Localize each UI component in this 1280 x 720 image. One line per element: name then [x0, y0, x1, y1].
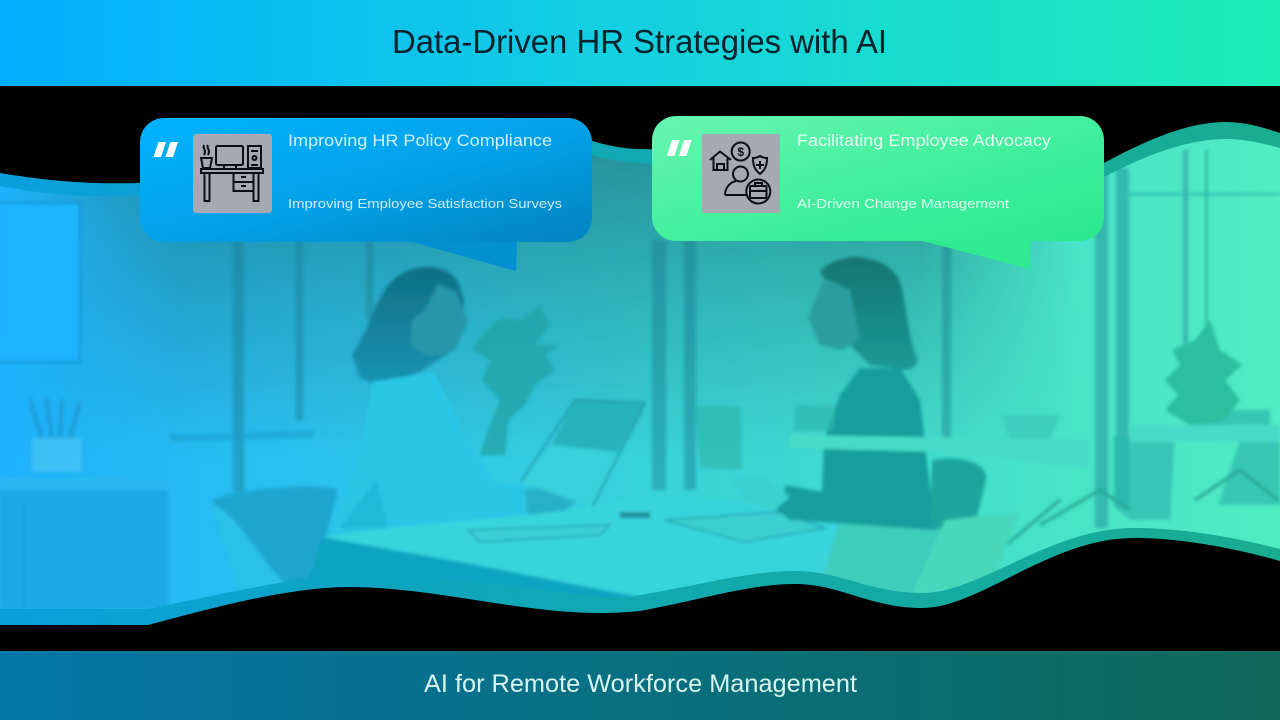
chairs and back room	[695, 405, 1280, 520]
under-table shadow	[285, 537, 700, 620]
heading: Facilitating Employee Advocacy	[797, 131, 1052, 150]
top black wave	[0, 86, 1280, 184]
panel: right speech bubble	[652, 116, 1104, 269]
subheading: AI-Driven Change Management	[797, 196, 1009, 211]
bubble body	[140, 118, 592, 242]
laptop	[521, 400, 645, 507]
icon: employee benefits: $	[737, 145, 744, 159]
jacket	[776, 368, 935, 530]
bubble tail	[915, 239, 1030, 269]
quote mark	[154, 142, 178, 157]
hair	[820, 257, 918, 370]
icon: employee benefits	[702, 134, 780, 213]
right woman	[730, 257, 935, 530]
back tables	[790, 425, 1280, 468]
hand	[525, 483, 578, 518]
bubble body	[652, 116, 1104, 241]
blouse	[330, 372, 540, 532]
notebook	[468, 512, 825, 542]
icon: office desk	[193, 134, 272, 213]
left woman	[330, 267, 578, 532]
footer text: AI for Remote Workforce Management	[424, 670, 857, 698]
bottom black wave	[0, 538, 1280, 651]
subheading: Improving Employee Satisfaction Surveys	[288, 196, 563, 211]
pencil cup	[30, 398, 82, 472]
cabinet	[0, 478, 168, 609]
header bar	[0, 0, 1280, 86]
quote mark	[667, 140, 692, 156]
top wave band	[0, 86, 1280, 197]
left chair	[212, 486, 338, 590]
front chair	[912, 458, 1020, 594]
hands	[730, 475, 790, 510]
office photo background	[0, 139, 1280, 609]
footer bar	[0, 651, 1280, 720]
bottom wave band	[0, 528, 1280, 651]
table	[322, 495, 960, 597]
bubble tail	[405, 240, 517, 271]
face	[808, 278, 860, 350]
face	[410, 284, 468, 357]
heading: Improving HR Policy Compliance	[288, 131, 552, 150]
chair legs	[1000, 470, 1278, 550]
plant left	[472, 306, 560, 455]
panel: left speech bubble	[140, 118, 592, 271]
window posts	[233, 150, 1280, 528]
hair	[352, 267, 464, 386]
wall frame	[0, 203, 80, 362]
side table	[170, 431, 315, 442]
plant right	[1165, 320, 1242, 425]
title: Data-Driven HR Strategies with AI	[392, 23, 887, 60]
